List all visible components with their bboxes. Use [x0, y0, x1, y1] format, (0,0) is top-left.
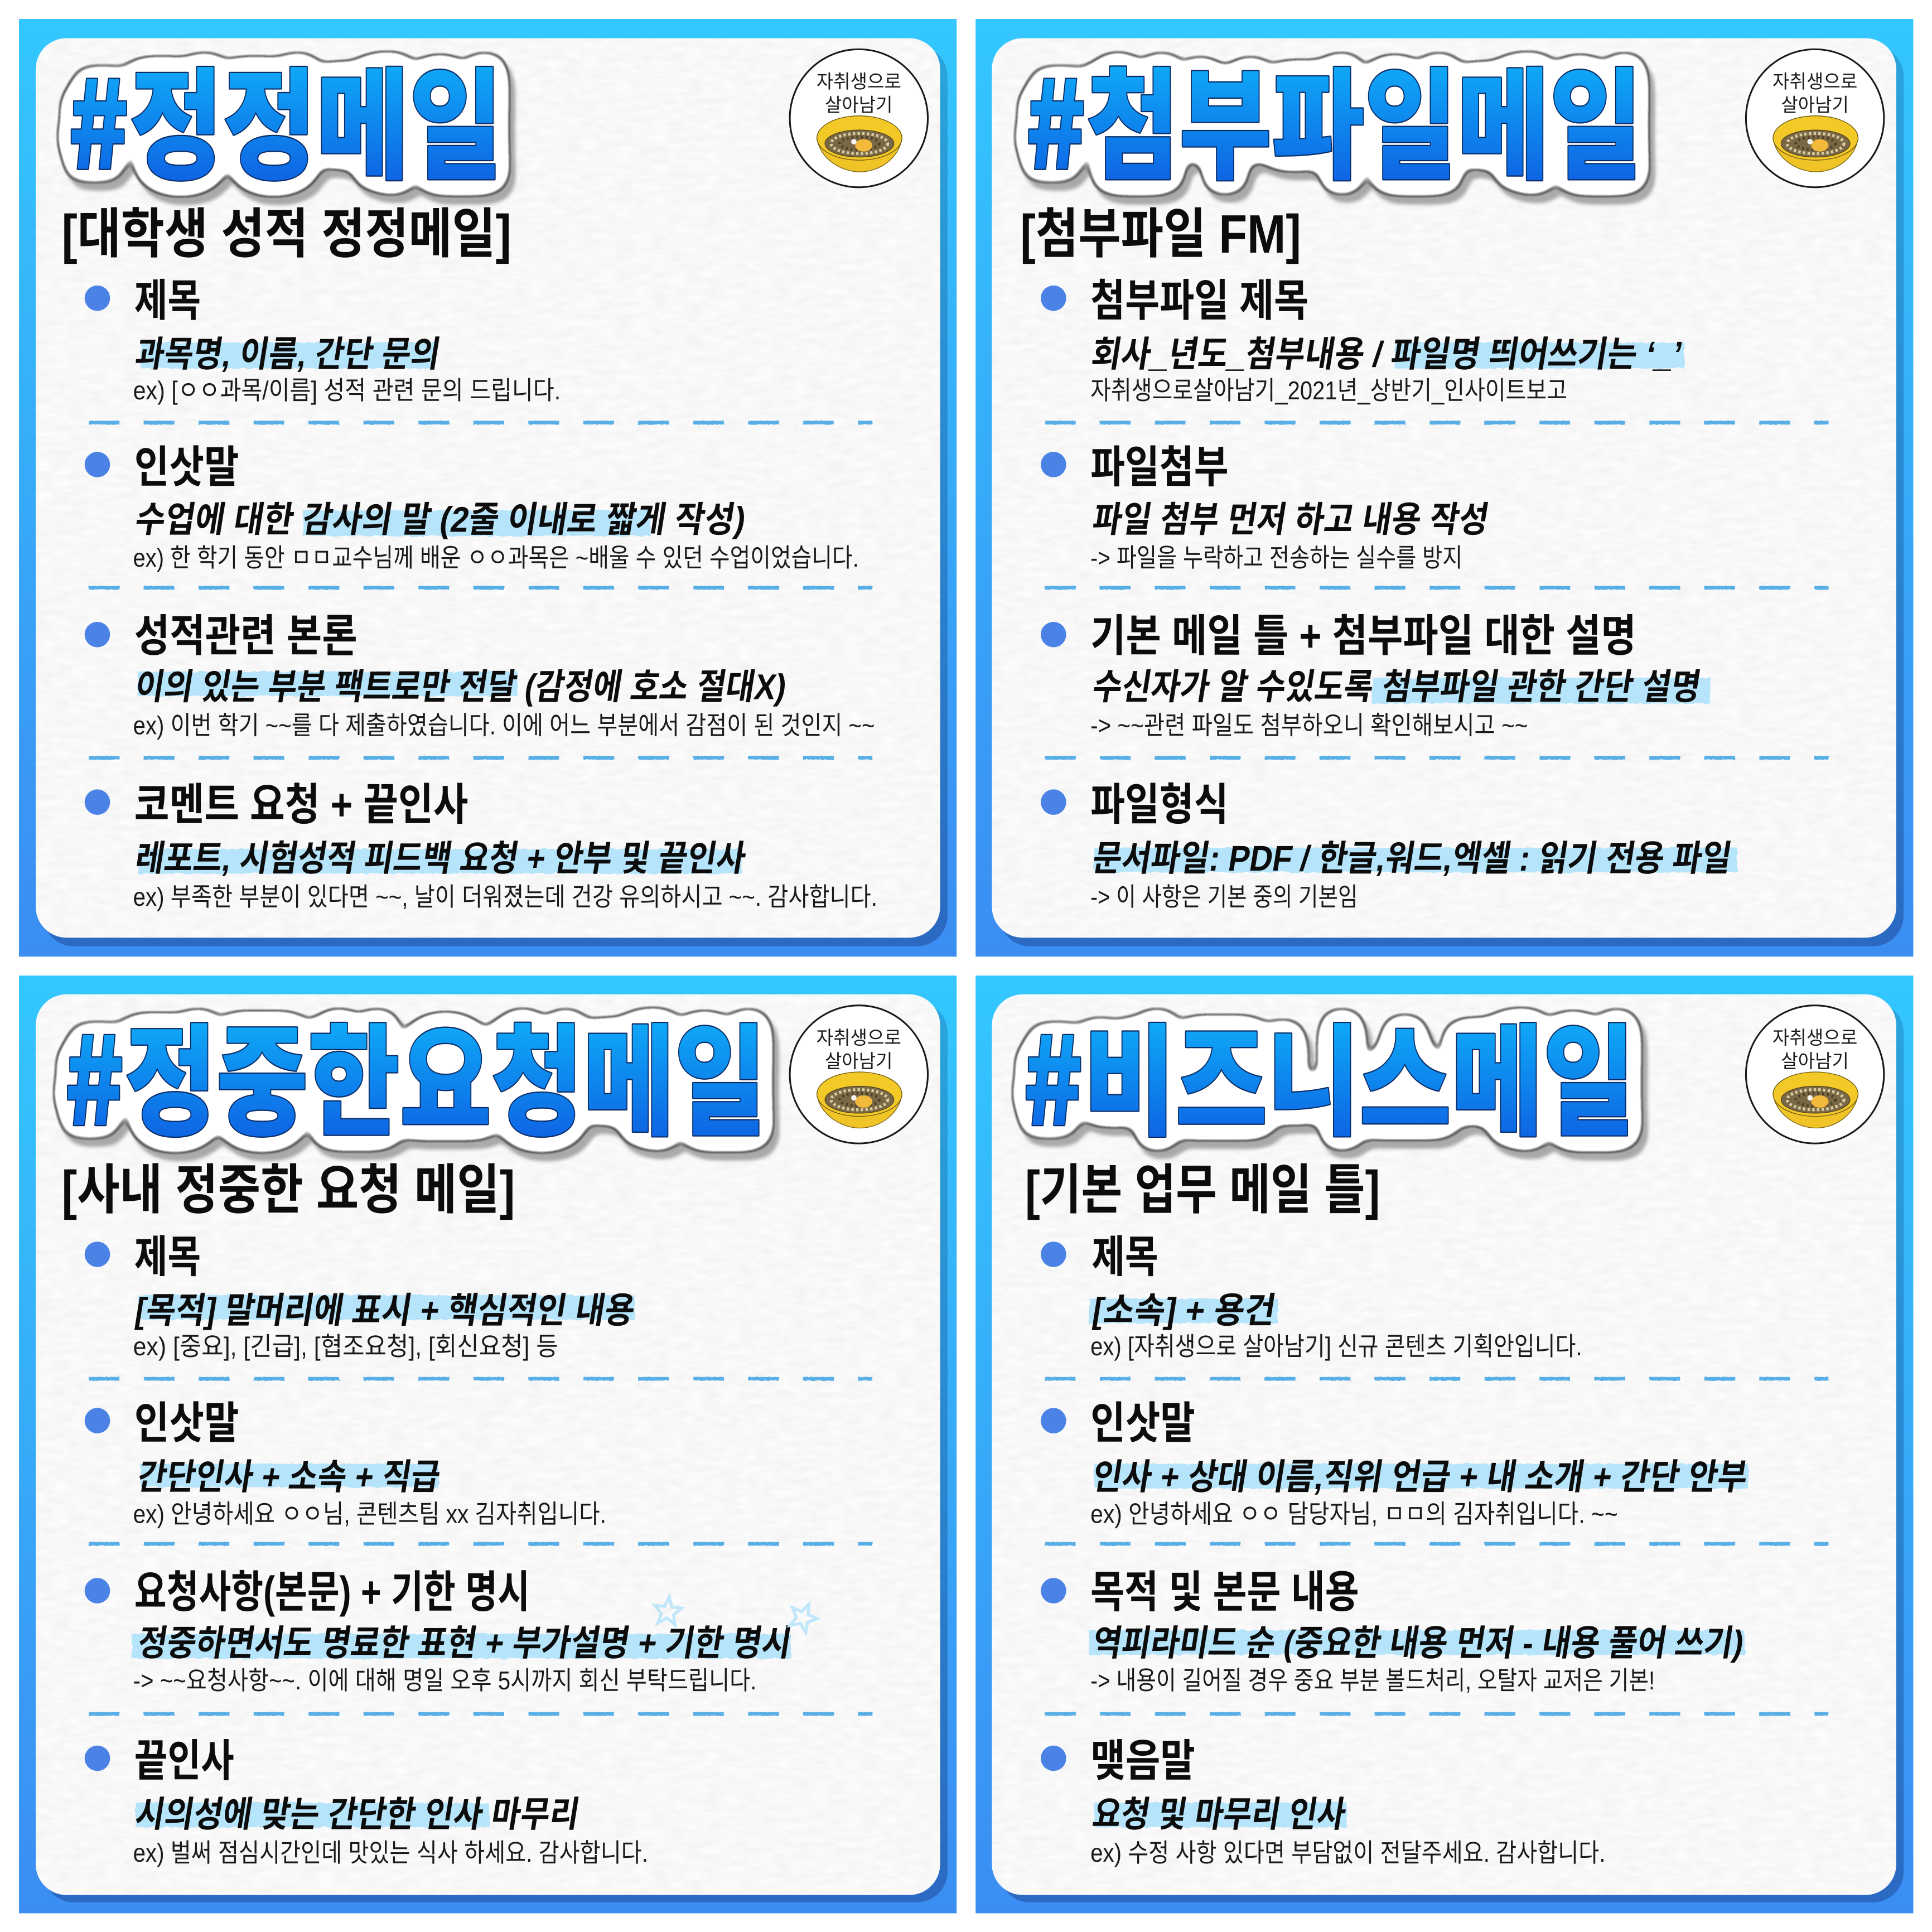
highlight	[1395, 342, 1684, 369]
panel: 비즈니스메일	[975, 975, 1913, 1913]
section: 끝인사	[85, 1736, 648, 1868]
example: -> ~~요청사항~~. 이에 대해 명일 오후 5시까지 회신 부탁드립니다.	[133, 1667, 756, 1696]
heading: 파일첨부	[1090, 442, 1229, 492]
highlight	[138, 1295, 635, 1320]
badge: 자취생으로 살아남기: 자취생으로	[817, 1028, 901, 1049]
example: ex) 수정 사항 있다면 부담없이 전달주세요. 감사합니다.	[1090, 1839, 1606, 1868]
highlight	[303, 510, 650, 536]
heading: 제목	[1091, 1231, 1158, 1282]
heading: 파일형식	[1090, 779, 1229, 830]
subheading: 수신자가 알 수있도록 첨부파일 관한 간단 설명	[1090, 668, 1703, 708]
subheading: 과목명, 이름, 간단 문의	[132, 336, 443, 375]
bullet	[1041, 789, 1066, 815]
badge: 자취생으로 살아남기	[790, 49, 928, 187]
bullet	[1041, 622, 1066, 647]
subtitle: [사내 정중한 요청 메일]	[61, 1161, 515, 1221]
example: 자취생으로살아남기_2021년_상반기_인사이트보고	[1090, 377, 1567, 405]
icon: star	[653, 1596, 683, 1625]
card shadow	[999, 1002, 1904, 1902]
subheading: 간단인사 + 소속 + 직급	[135, 1458, 443, 1498]
bullet	[1041, 452, 1066, 477]
section: 첨부파일 제목	[1041, 276, 1685, 405]
example: ex) [자취생으로 살아남기] 신규 콘텐츠 기획안입니다.	[1090, 1333, 1582, 1361]
panel background	[19, 975, 957, 1913]
section: 목적 및 본문 내용	[1041, 1567, 1747, 1696]
heading: 기본 메일 틀 + 첨부파일 대한 설명	[1090, 611, 1636, 661]
icon: noodle bowl	[1773, 116, 1858, 172]
panel: 첨부파일메일	[975, 19, 1913, 957]
highlight	[1094, 1464, 1749, 1489]
example: ex) 부족한 부분이 있다면 ~~, 날이 더워졌는데 건강 유의하시고 ~~. 감사합니다.	[133, 883, 877, 912]
heading: 인삿말	[134, 1398, 239, 1448]
example: -> 이 사항은 기본 중의 기본임	[1090, 883, 1358, 912]
heading: 성적관련 본론	[134, 611, 358, 661]
highlight	[1089, 1630, 1745, 1655]
subheading: 역피라미드 순 (중요한 내용 먼저 - 내용 풀어 쓰기)	[1090, 1625, 1747, 1664]
highlight	[138, 672, 518, 696]
example: ex) 벌써 점심시간인데 맛있는 식사 하세요. 감사합니다.	[133, 1839, 648, 1868]
bullet	[85, 622, 110, 647]
subheading: [목적] 말머리에 표시 + 핵심적인 내용	[132, 1292, 637, 1331]
bullet	[85, 1746, 110, 1771]
badge: 자취생으로 살아남기: 살아남기	[825, 95, 893, 117]
bullet	[85, 1578, 110, 1603]
section: 제목	[1041, 1231, 1582, 1361]
subheading: 정중하면서도 명료한 표현 + 부가설명 + 기한 명시	[135, 1625, 794, 1664]
heading: 제목	[134, 1231, 201, 1282]
highlight	[136, 1803, 489, 1827]
card shadow	[43, 1002, 948, 1902]
paper card	[36, 994, 940, 1895]
badge: 자취생으로 살아남기: 살아남기	[1781, 1052, 1849, 1073]
badge: 자취생으로 살아남기	[1746, 49, 1884, 187]
subtitle: [첨부파일 FM]	[1020, 205, 1301, 265]
heading: 인삿말	[134, 442, 239, 492]
heading: 끝인사	[134, 1736, 234, 1786]
heading: 코멘트 요청 + 끝인사	[134, 779, 468, 830]
title: #정중한요청메일: #정중한요청메일	[64, 986, 766, 1161]
title: #정정메일: #정정메일	[68, 30, 503, 205]
title: #비즈니스메일: #비즈니스메일	[1023, 986, 1635, 1161]
panel: 정정메일	[19, 19, 957, 957]
badge: 자취생으로 살아남기: 자취생으로	[1772, 1028, 1857, 1049]
section: 제목	[85, 1231, 637, 1361]
highlight	[141, 342, 435, 369]
example: ex) 안녕하세요 ㅇㅇ님, 콘텐츠팀 xx 김자취입니다.	[133, 1501, 606, 1529]
example: -> 파일을 누락하고 전송하는 실수를 방지	[1090, 544, 1462, 573]
heading: 요청사항(본문) + 기한 명시	[134, 1567, 530, 1617]
section: 인삿말	[85, 442, 859, 573]
paper card	[992, 994, 1896, 1895]
highlight	[1094, 848, 1737, 872]
subheading: 요청 및 마무리 인사	[1090, 1796, 1349, 1836]
subheading: 파일 첨부 먼저 하고 내용 작성	[1090, 501, 1491, 540]
highlight	[1094, 1803, 1347, 1827]
bullet	[1041, 1242, 1066, 1267]
subheading: 인사 + 상대 이름,직위 언급 + 내 소개 + 간단 안부	[1090, 1458, 1750, 1498]
panel background	[975, 975, 1913, 1913]
badge: 자취생으로 살아남기	[1746, 1006, 1884, 1143]
highlight	[1089, 1298, 1278, 1324]
bullet	[85, 1242, 110, 1267]
heading: 목적 및 본문 내용	[1090, 1567, 1359, 1617]
bullet	[1041, 1578, 1066, 1603]
icon: noodle bowl	[817, 116, 902, 172]
bullet	[85, 452, 110, 477]
badge: 자취생으로 살아남기: 자취생으로	[817, 72, 901, 93]
example: -> 내용이 길어질 경우 중요 부분 볼드처리, 오탈자 교저은 기본!	[1090, 1667, 1655, 1696]
subheading: 문서파일: PDF / 한글,워드,엑셀 : 읽기 전용 파일	[1090, 840, 1735, 879]
subtitle: [기본 업무 메일 틀]	[1025, 1161, 1380, 1221]
bullet	[1041, 286, 1066, 311]
highlight	[1373, 678, 1710, 703]
section: 인삿말	[1041, 1398, 1750, 1529]
heading: 맺음말	[1090, 1736, 1195, 1786]
example: ex) 안녕하세요 ㅇㅇ 담당자님, ㅁㅁ의 김자취입니다. ~~	[1090, 1501, 1618, 1529]
example: -> ~~관련 파일도 첨부하오니 확인해보시고 ~~	[1090, 712, 1528, 741]
badge: 자취생으로 살아남기: 살아남기	[1781, 95, 1849, 117]
section: 기본 메일 틀 + 첨부파일 대한 설명	[1041, 611, 1710, 741]
subheading: 이의 있는 부분 팩트로만 전달 (감정에 호소 절대X)	[132, 668, 789, 708]
panel: 정중한요청메일	[19, 975, 957, 1913]
badge: 자취생으로 살아남기: 자취생으로	[1772, 72, 1857, 93]
badge: 자취생으로 살아남기	[790, 1006, 928, 1143]
section: 인삿말	[85, 1398, 606, 1529]
panel background	[975, 19, 1913, 957]
subheading: 수업에 대한 감사의 말 (2줄 이내로 짧게 작성)	[132, 501, 748, 540]
example: ex) [중요], [긴급], [협조요청], [회신요청] 등	[133, 1333, 558, 1361]
paper card	[36, 38, 940, 938]
example: ex) 한 학기 동안 ㅁㅁ교수님께 배운 ㅇㅇ과목은 ~배울 수 있던 수업이었습니다.	[133, 544, 859, 573]
bullet	[85, 286, 110, 311]
subheading: 레포트, 시험성적 피드백 요청 + 안부 및 끝인사	[132, 840, 749, 879]
heading: 인삿말	[1090, 1398, 1195, 1448]
card shadow	[999, 46, 1904, 946]
title: #첨부파일메일: #첨부파일메일	[1025, 30, 1643, 205]
badge: 자취생으로 살아남기: 살아남기	[825, 1052, 893, 1073]
paper card	[992, 38, 1896, 938]
section: 제목	[85, 276, 561, 405]
subheading: 시의성에 맞는 간단한 인사 마무리	[132, 1796, 582, 1836]
section: 코멘트 요청 + 끝인사	[85, 779, 877, 912]
section: 맺음말	[1041, 1736, 1606, 1868]
bullet	[85, 789, 110, 815]
section: 파일형식	[1041, 779, 1737, 912]
highlight	[132, 1634, 791, 1659]
icon: noodle bowl	[817, 1072, 902, 1128]
heading: 첨부파일 제목	[1090, 276, 1308, 326]
example: ex) [ㅇㅇ과목/이름] 성적 관련 문의 드립니다.	[133, 377, 561, 405]
icon: star	[785, 1598, 821, 1635]
bullet	[1041, 1408, 1066, 1433]
bullet	[1041, 1746, 1066, 1771]
panel background	[19, 19, 957, 957]
section: 파일첨부	[1041, 442, 1491, 573]
heading: 제목	[134, 276, 201, 326]
subtitle: [대학생 성적 정정메일]	[61, 205, 511, 265]
highlight	[141, 1464, 438, 1487]
bullet	[85, 1408, 110, 1433]
icon: noodle bowl	[1773, 1072, 1858, 1128]
subheading: [소속] + 용건	[1090, 1292, 1278, 1331]
section: 성적관련 본론	[85, 611, 875, 741]
section: 요청사항(본문) + 기한 명시	[85, 1567, 821, 1696]
highlight	[138, 849, 742, 873]
subheading: 회사_년도_첨부내용 / 파일명 띄어쓰기는 ‘_’	[1089, 336, 1685, 375]
card shadow	[43, 46, 948, 946]
example: ex) 이번 학기 ~~를 다 제출하였습니다. 이에 어느 부분에서 감점이 된 것인지 ~~	[133, 712, 875, 741]
